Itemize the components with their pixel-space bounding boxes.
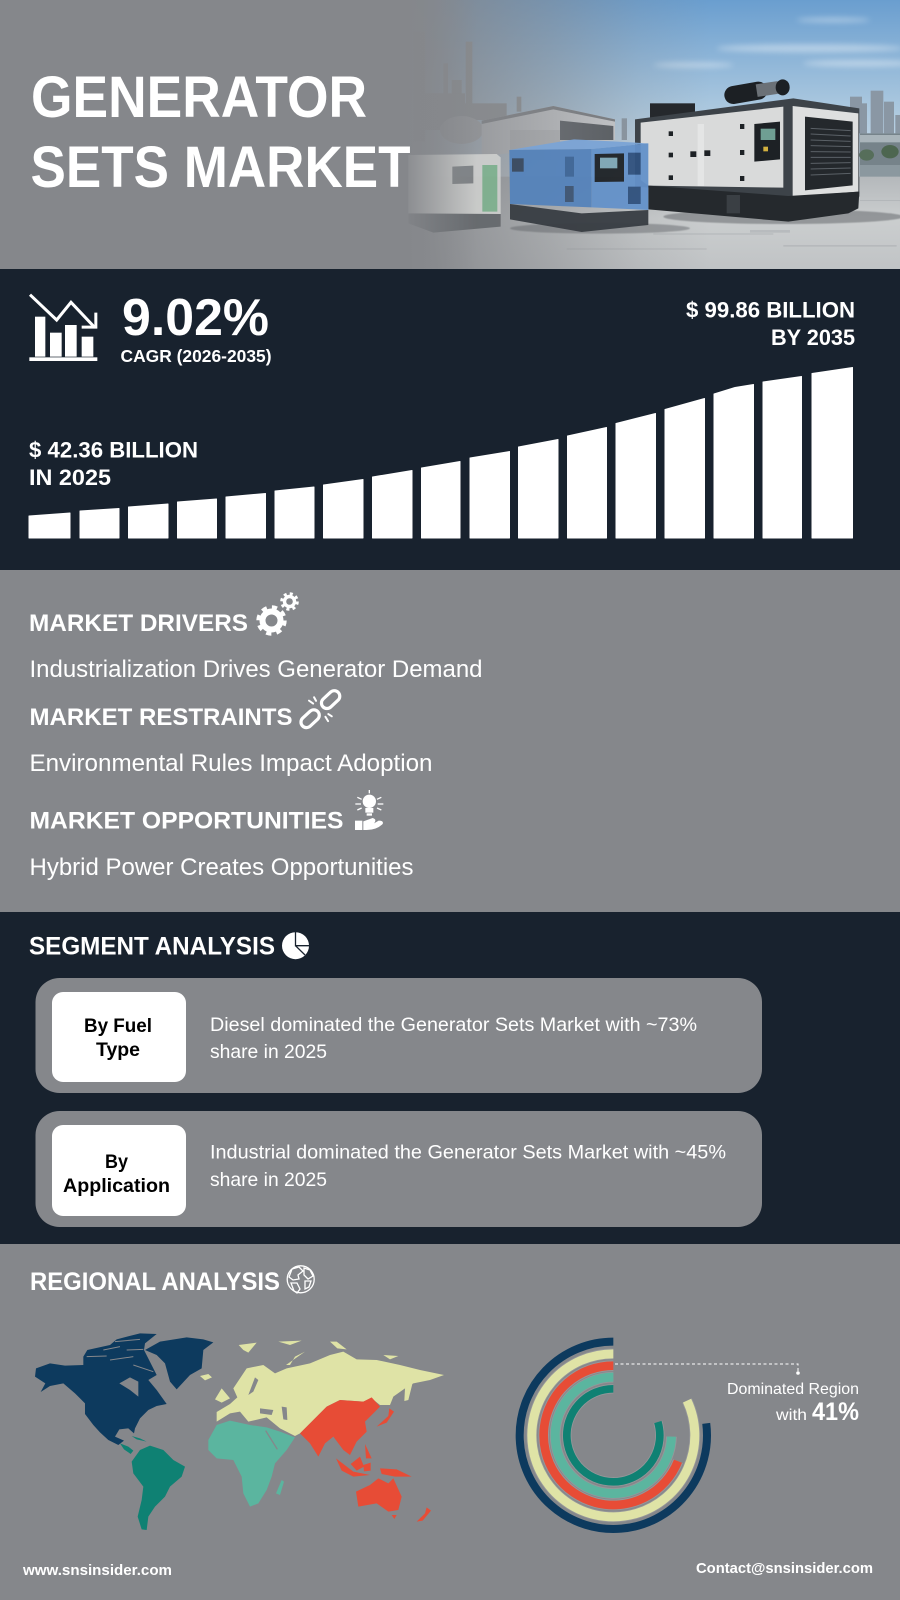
callout: dominated region	[727, 1381, 859, 1426]
2035 market value: $ 99.86 BILLION	[686, 298, 855, 322]
label: by fuel type: By Fuel	[84, 1015, 152, 1037]
CAGR value: 9.02%	[122, 289, 269, 347]
region: North America	[35, 1333, 213, 1445]
label box	[52, 1125, 186, 1216]
text: restraint: Environmental Rules Impact Adoption	[30, 750, 432, 777]
label: by application	[63, 1151, 170, 1197]
ring: Africa	[555, 1377, 671, 1493]
text: driver: Industrialization Drives Generator Demand	[30, 656, 482, 683]
callout leader line	[615, 1364, 800, 1375]
text: industrial share	[210, 1142, 726, 1191]
label: by fuel type: Type	[96, 1039, 140, 1061]
panel: market dynamics	[0, 570, 900, 912]
CAGR label: CAGR (2026-2035)	[120, 346, 272, 366]
text: diesel share: share in 2025	[210, 1041, 327, 1063]
2035 market value: BY 2035	[771, 325, 855, 350]
label: by application: Application	[63, 1175, 170, 1197]
panel: header	[0, 0, 900, 270]
panel: regional analysis	[0, 1244, 900, 1600]
callout: dominated region: 41%	[812, 1398, 859, 1426]
icon: pie chart	[282, 932, 309, 959]
text: diesel share	[210, 1014, 697, 1063]
text: opportunity: Hybrid Power Creates Opportunities	[30, 854, 414, 881]
blue generator	[509, 139, 648, 232]
ring: Europe	[532, 1354, 695, 1517]
2025 market value	[29, 438, 198, 490]
callout: dominated region: with	[775, 1407, 807, 1424]
world map	[35, 1333, 444, 1530]
2025 market value: $ 42.36 BILLION	[29, 438, 198, 462]
ring: North America	[520, 1342, 707, 1529]
text: industrial share: share in 2025	[210, 1169, 327, 1191]
icon: chart with trend arrow	[29, 295, 97, 361]
label: by application: By	[105, 1151, 128, 1173]
panel: market size and CAGR	[0, 269, 900, 570]
heading: market drivers: MARKET DRIVERS	[29, 610, 248, 637]
radial bar chart	[520, 1342, 707, 1529]
title	[30, 65, 410, 200]
heading: market opportunities: MARKET OPPORTUNITIES	[30, 808, 344, 834]
heading: market restraints: MARKET RESTRAINTS	[30, 704, 292, 731]
ring: South America	[567, 1389, 660, 1482]
icon: broken chain	[293, 682, 348, 736]
region: Asia Pacific	[300, 1397, 431, 1522]
title: GENERATOR	[31, 65, 367, 130]
heading: segment analysis: SEGMENT ANALYSIS	[29, 932, 275, 960]
footer: website: www.snsinsider.com	[22, 1562, 172, 1579]
ring: Asia Pacific	[544, 1366, 678, 1505]
icon: globe	[287, 1266, 314, 1293]
callout: dominated region: Dominated Region	[727, 1381, 859, 1398]
card: by fuel type	[36, 978, 762, 1093]
title: SETS MARKET	[30, 135, 410, 200]
heading: regional analysis: REGIONAL ANALYSIS	[30, 1268, 280, 1296]
large generator	[635, 79, 859, 222]
2025 market value: IN 2025	[29, 465, 111, 490]
text: industrial share: Industrial dominated the Generator Sets Market with ~45%	[210, 1142, 726, 1164]
label box	[52, 992, 186, 1082]
photo: generator sets at industrial site	[400, 0, 900, 270]
icon: bulb in hand	[355, 790, 383, 830]
text: diesel share: Diesel dominated the Generator Sets Market with ~73%	[210, 1014, 697, 1036]
2035 market value	[686, 298, 855, 350]
panel: segment analysis	[0, 912, 900, 1244]
region: South America	[120, 1436, 185, 1530]
region: Africa	[208, 1421, 295, 1507]
icon: gears	[258, 594, 297, 634]
bar chart: market growth	[29, 368, 852, 538]
footer: contact: Contact@snsinsider.com	[696, 1560, 873, 1577]
region: Europe and Russia	[200, 1341, 444, 1436]
white generator	[408, 154, 501, 233]
label: by fuel type	[84, 1015, 152, 1061]
card: by application	[36, 1111, 762, 1227]
